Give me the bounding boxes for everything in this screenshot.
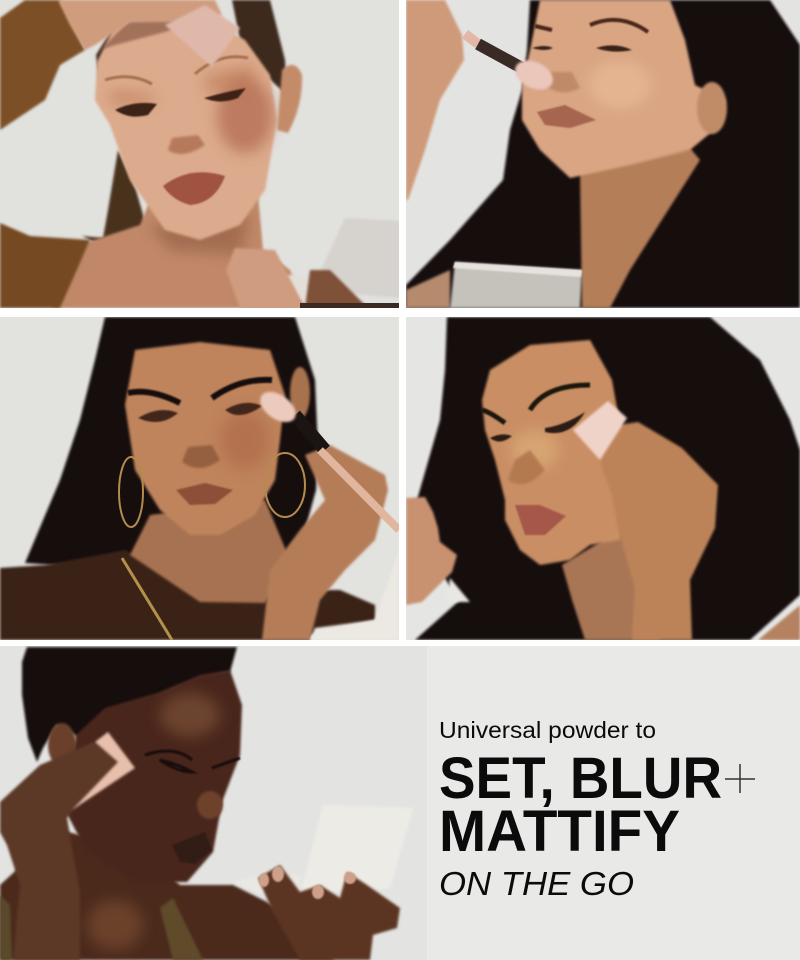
compact [310, 550, 399, 640]
face [66, 670, 242, 882]
photo background area [0, 646, 427, 960]
ear [697, 82, 727, 134]
hand on cheek [598, 422, 718, 640]
necklace [122, 558, 172, 640]
lips [163, 172, 225, 205]
neck highlight [87, 900, 143, 950]
forehead highlight [160, 693, 220, 737]
intro line: Universal powder to [439, 717, 656, 743]
headline line two: MATTIFY [439, 799, 680, 864]
left peach object [406, 270, 450, 308]
lips [515, 505, 566, 535]
straight dark hair [25, 317, 318, 570]
neck and chest [580, 148, 700, 308]
slicked-back hair [96, 0, 287, 95]
curly black hair [415, 317, 800, 640]
fingers [226, 248, 305, 308]
compact base shadow [300, 303, 399, 308]
face [522, 0, 725, 178]
face [125, 342, 285, 535]
hand [262, 445, 388, 640]
ear [290, 367, 310, 419]
left hand fingers [406, 497, 457, 605]
panel: model one with sponge on forehead [0, 0, 400, 308]
eye shadow [110, 65, 255, 105]
under-eye highlight [511, 430, 559, 470]
sweater sleeve upper [0, 0, 85, 130]
long black hair [406, 0, 800, 308]
short black hair [22, 647, 237, 762]
face [95, 15, 277, 240]
face [482, 340, 625, 565]
eyes and brows [128, 380, 272, 422]
raised hand [0, 742, 120, 960]
ear [277, 65, 302, 133]
strap [160, 898, 203, 960]
neck and shoulders [0, 830, 335, 960]
cheek glow [220, 410, 270, 470]
panel: model five with compact and headline [0, 646, 800, 960]
headline line one: SET, BLUR [439, 746, 722, 811]
panel: model four with curly hair and sponge [406, 317, 800, 640]
brush handle dark [295, 415, 325, 450]
forehead shadow under hand [102, 20, 172, 50]
panel: model two with brush on nose [406, 0, 800, 308]
cheek blush [217, 77, 273, 153]
right shoulder [758, 605, 800, 640]
tagline: ON THE GO [439, 865, 634, 902]
hand holding compact [258, 865, 400, 960]
nose [168, 135, 205, 154]
hand with brush [406, 0, 464, 200]
compact top edge [453, 262, 582, 277]
brush ferrule [465, 34, 478, 44]
eye and brow [145, 751, 240, 772]
sponge [165, 5, 240, 67]
brush tip [255, 386, 301, 428]
brush tip [513, 58, 554, 91]
fingernails [259, 866, 356, 899]
neck [130, 500, 290, 603]
lips [537, 105, 596, 128]
cheek highlight [588, 61, 652, 109]
nose [545, 72, 580, 92]
sponge [72, 732, 135, 810]
nose [182, 445, 220, 468]
neck shadow [150, 215, 250, 255]
lips [176, 483, 233, 505]
headline text block [439, 717, 755, 902]
compact [322, 218, 399, 298]
neck [562, 530, 660, 640]
sponge [573, 401, 627, 460]
compact tray [286, 274, 304, 302]
compact corner [447, 578, 470, 602]
panel: model three with angled brush [0, 317, 399, 640]
dress [0, 550, 375, 640]
hoop earrings [119, 453, 305, 527]
neck and chest [52, 195, 305, 308]
eyes and brows [105, 57, 248, 117]
nose [197, 791, 223, 819]
plus sign [725, 764, 755, 793]
ponytail [82, 150, 144, 242]
eyes and brows [532, 20, 648, 52]
ear [48, 723, 76, 767]
thumb [305, 270, 368, 308]
lips [172, 832, 212, 864]
brush handle light [320, 450, 399, 530]
left strap [0, 895, 12, 960]
compact [300, 805, 413, 895]
brush handle [478, 44, 522, 68]
compact base [232, 875, 300, 892]
compact [450, 262, 582, 308]
nose [508, 450, 545, 484]
hand over forehead [58, 0, 222, 50]
eyes and brows [482, 385, 590, 442]
sweater sleeve lower [0, 223, 90, 308]
